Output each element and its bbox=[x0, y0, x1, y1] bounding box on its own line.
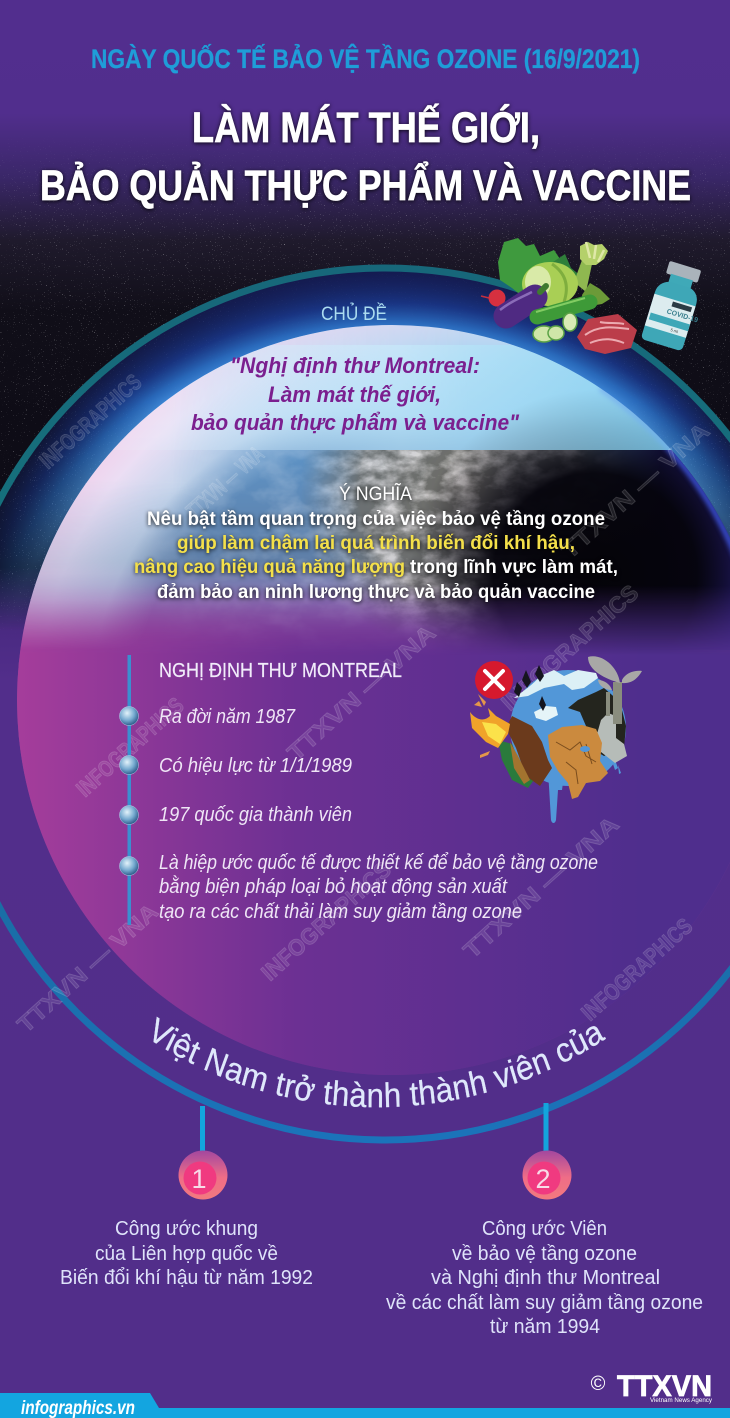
meaning text bbox=[134, 508, 618, 603]
leafy greens bbox=[498, 238, 562, 306]
theme band bbox=[134, 345, 672, 450]
penguins bbox=[514, 665, 546, 711]
text: convention 1: Biến đổi khí hậu từ năm 1992 bbox=[60, 1267, 313, 1289]
green land bbox=[498, 740, 534, 788]
theme quote: bảo quản thực phẩm và vaccine" bbox=[191, 410, 520, 435]
text: convention 2: và Nghị định thư Montreal bbox=[431, 1267, 660, 1289]
list: Montreal Protocol facts: Là hiệp ước quốc tế được thiết kế để bảo vệ tầng ozone bbox=[159, 852, 598, 874]
watermarks: INFOGRAPHICS bbox=[576, 913, 697, 1026]
watermarks: INFOGRAPHICS bbox=[496, 579, 643, 716]
list: Montreal Protocol facts: 197 quốc gia thành viên bbox=[159, 804, 352, 826]
text: convention 2: từ năm 1994 bbox=[490, 1316, 600, 1338]
text: convention 1: của Liên hợp quốc về bbox=[95, 1243, 278, 1265]
radish bbox=[488, 290, 506, 306]
title bbox=[40, 103, 691, 210]
label: theme: CHỦ ĐỀ bbox=[321, 303, 387, 325]
watermarks: TTXVN — VNA bbox=[12, 898, 163, 1038]
meaning text: Nêu bật tầm quan trọng của việc bảo vệ tầng ozone bbox=[147, 508, 605, 530]
list: Montreal Protocol facts: Có hiệu lực từ 1/1/1989 bbox=[159, 755, 352, 777]
watermarks: TTXVN — VNA bbox=[282, 619, 441, 766]
label: meaning: Ý NGHĨA bbox=[339, 483, 412, 505]
flame bbox=[470, 708, 510, 748]
zucchini slices bbox=[533, 326, 555, 342]
starfield bbox=[0, 130, 730, 640]
cross mark badge bbox=[475, 661, 513, 699]
theme quote: "Nghị định thư Montreal: bbox=[230, 353, 480, 378]
watermarks: TTXVN — VNA bbox=[458, 811, 624, 964]
icon: damaged earth bbox=[470, 656, 642, 823]
planet earth sphere bbox=[0, 325, 730, 1080]
text: convention 2: về các chất làm suy giảm tầng ozone bbox=[386, 1292, 703, 1314]
logo: TTXVN: © bbox=[591, 1373, 606, 1395]
brown land bbox=[506, 716, 552, 786]
badge 1: 1 bbox=[191, 1164, 207, 1194]
meaning text: giúp làm chậm lại quá trình biến đổi khí hậu, bbox=[177, 532, 575, 554]
footer band bbox=[0, 1393, 730, 1418]
logo: TTXVN: TTXVN bbox=[617, 1370, 712, 1403]
list: Montreal Protocol facts: tạo ra các chất thải làm suy giảm tầng ozone bbox=[159, 901, 522, 923]
curved heading: Việt Nam trở thành thành viên của bbox=[153, 1016, 606, 1108]
list: Montreal Protocol facts bbox=[159, 706, 598, 923]
black polluted land bbox=[568, 688, 626, 756]
text: convention 2: Công ước Viên bbox=[482, 1218, 607, 1240]
theme quote bbox=[191, 353, 520, 435]
watermarks: INFOGRAPHICS bbox=[71, 692, 189, 802]
badge 2: 2 bbox=[535, 1164, 551, 1194]
watermarks: TTXVN — VNA bbox=[181, 441, 269, 524]
meaning text: đảm bảo an ninh lương thực và bảo quản vaccine bbox=[157, 581, 595, 603]
watermarks: TTXVN — VNA bbox=[556, 417, 715, 564]
text: convention 2: về bảo vệ tầng ozone bbox=[452, 1243, 637, 1265]
ozone ring bbox=[0, 268, 730, 1140]
ice cap bbox=[514, 670, 598, 698]
meaning text: nâng cao hiệu quả năng lượng bbox=[134, 556, 405, 578]
cabbage bbox=[522, 262, 578, 306]
connector stem 2 bbox=[544, 1103, 548, 1154]
timeline: Montreal Protocol bbox=[120, 655, 138, 925]
badge 1 bbox=[178, 1150, 228, 1200]
text: convention 2 bbox=[386, 1218, 703, 1338]
chimneys bbox=[597, 713, 627, 763]
watermarks bbox=[12, 369, 715, 1038]
broccoli bbox=[582, 283, 610, 307]
list: Montreal Protocol facts: bằng biện pháp loại bỏ hoạt động sản xuất bbox=[159, 875, 508, 898]
watermarks: INFOGRAPHICS bbox=[256, 856, 396, 986]
title: LÀM MÁT THẾ GIỚI, bbox=[192, 103, 540, 152]
atmosphere haze bbox=[0, 272, 730, 614]
icon: vaccine vial: COVID-19 bbox=[666, 308, 699, 324]
cracked desert bbox=[548, 725, 608, 799]
text: convention 1: Công ước khung bbox=[115, 1218, 258, 1240]
zucchini bbox=[537, 302, 590, 317]
badge 2 bbox=[522, 1150, 572, 1200]
theme quote: Làm mát thế giới, bbox=[268, 382, 441, 407]
icon: globe bullets bbox=[120, 706, 138, 876]
icon: vaccine vial: 5 ml bbox=[670, 327, 679, 334]
icon: vaccine vial bbox=[641, 259, 712, 353]
eggplant bbox=[506, 297, 535, 316]
icon: vegetables and meat bbox=[481, 238, 637, 354]
meat bbox=[577, 314, 637, 354]
connector stem 1 bbox=[200, 1106, 205, 1154]
subtitle: NGÀY QUỐC TẾ BẢO VỆ TẦNG OZONE (16/9/2021) bbox=[91, 42, 640, 74]
logo: TTXVN: Vietnam News Agency bbox=[650, 1398, 712, 1404]
celery bbox=[574, 260, 592, 292]
heading: Montreal Protocol: NGHỊ ĐỊNH THƯ MONTREAL bbox=[159, 660, 402, 682]
meaning text: trong lĩnh vực làm mát, bbox=[410, 556, 618, 578]
list: Montreal Protocol facts: Ra đời năm 1987 bbox=[159, 706, 296, 728]
text: convention 1 bbox=[60, 1218, 313, 1289]
watermarks: INFOGRAPHICS bbox=[34, 369, 146, 474]
